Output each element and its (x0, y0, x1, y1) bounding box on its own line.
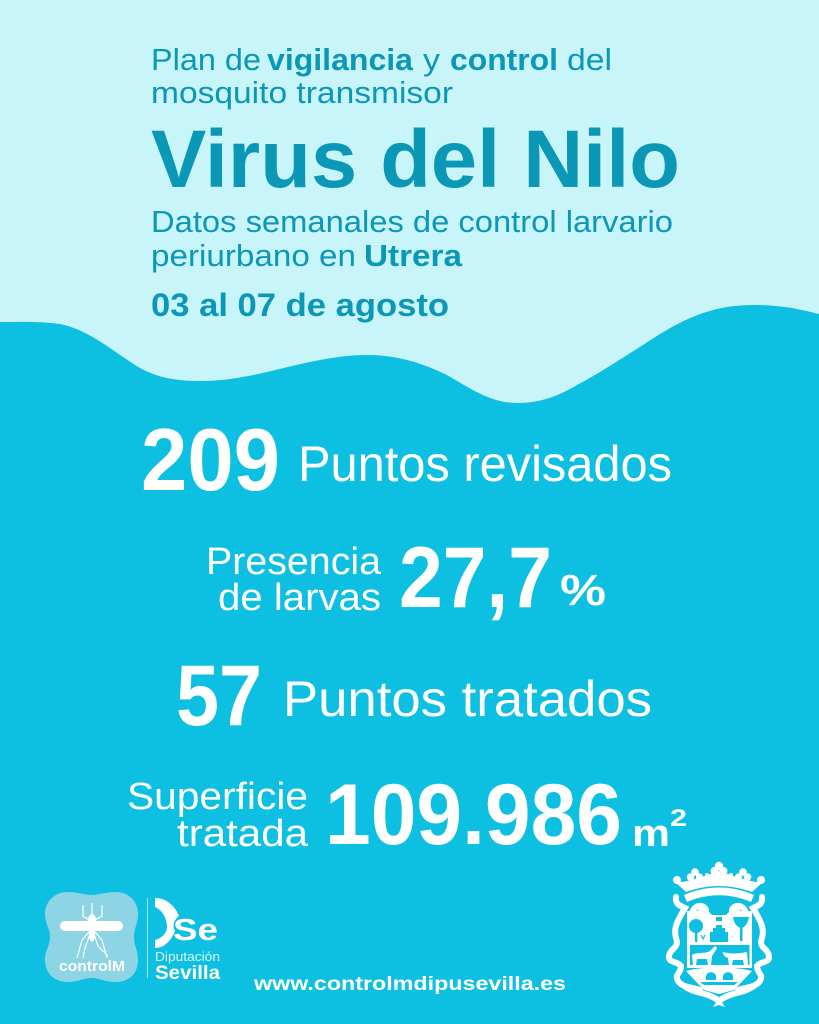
subtitle line 2: mosquito transmisor (151, 75, 453, 110)
title: Virus del Nilo (151, 114, 680, 205)
stat: superficie tratada (127, 767, 687, 863)
logo: Diputación de Sevilla: Sevilla (155, 963, 220, 984)
date: 03 al 07 de agosto (151, 287, 449, 323)
stat: superficie tratada: m (632, 813, 670, 855)
wave: blue background panel (0, 305, 819, 1024)
stat: presencia de larvas: % (560, 566, 606, 615)
stat: presencia de larvas: Presencia (206, 541, 382, 583)
logo: controlM (45, 892, 138, 982)
website url: www.controlmdipusevilla.es (253, 973, 566, 995)
subtitle line 1: Plan de (151, 42, 261, 77)
subtitle line 1: vigilancia (267, 42, 414, 77)
icon: DSe mark (155, 898, 179, 948)
description line 2: periurbano en (151, 238, 356, 273)
divider (147, 898, 148, 978)
stat: puntos revisados: 209 (141, 410, 280, 509)
logo: Diputación de Sevilla: Diputación (155, 950, 220, 964)
stat: presencia de larvas (206, 530, 606, 626)
description line 1: Datos semanales de control larvario (151, 204, 673, 239)
logo: Diputación de Sevilla: Se (173, 912, 218, 947)
subtitle line 1: y (423, 42, 441, 77)
stat: puntos revisados (141, 410, 672, 509)
subtitle line 1: control (450, 42, 558, 77)
subtitle line 1 (151, 42, 612, 77)
animals: horse and bull (692, 946, 717, 965)
stat: superficie tratada: 2 (670, 805, 687, 832)
stat: superficie tratada: tratada (177, 813, 309, 855)
description line 2 (151, 238, 463, 273)
description line 2: Utrera (364, 238, 463, 273)
icon: coat of arms of Utrera (669, 862, 769, 1007)
stat: presencia de larvas: 27,7 (399, 530, 552, 626)
shield middle band (687, 943, 752, 968)
stat: superficie tratada: 109.986 (325, 767, 622, 863)
logo text: controlM: controlM (59, 958, 125, 975)
stat: puntos revisados: Puntos revisados (298, 436, 672, 492)
stat: presencia de larvas: de larvas (218, 577, 381, 619)
stat: puntos tratados: Puntos tratados (283, 671, 652, 727)
shield upper field with tree, castle and chalice (687, 911, 752, 943)
logo: Diputación de Sevilla (155, 898, 220, 984)
stat: superficie tratada: Superficie (127, 776, 308, 818)
crown (673, 862, 765, 902)
subtitle line 1: del (567, 42, 612, 77)
header text block (151, 42, 680, 323)
stat: puntos tratados: 57 (176, 648, 262, 744)
shield mantling scrolls (669, 897, 769, 1001)
icon: mosquito (60, 903, 123, 958)
bridge and water field (686, 967, 752, 994)
stat: puntos tratados (176, 648, 652, 744)
